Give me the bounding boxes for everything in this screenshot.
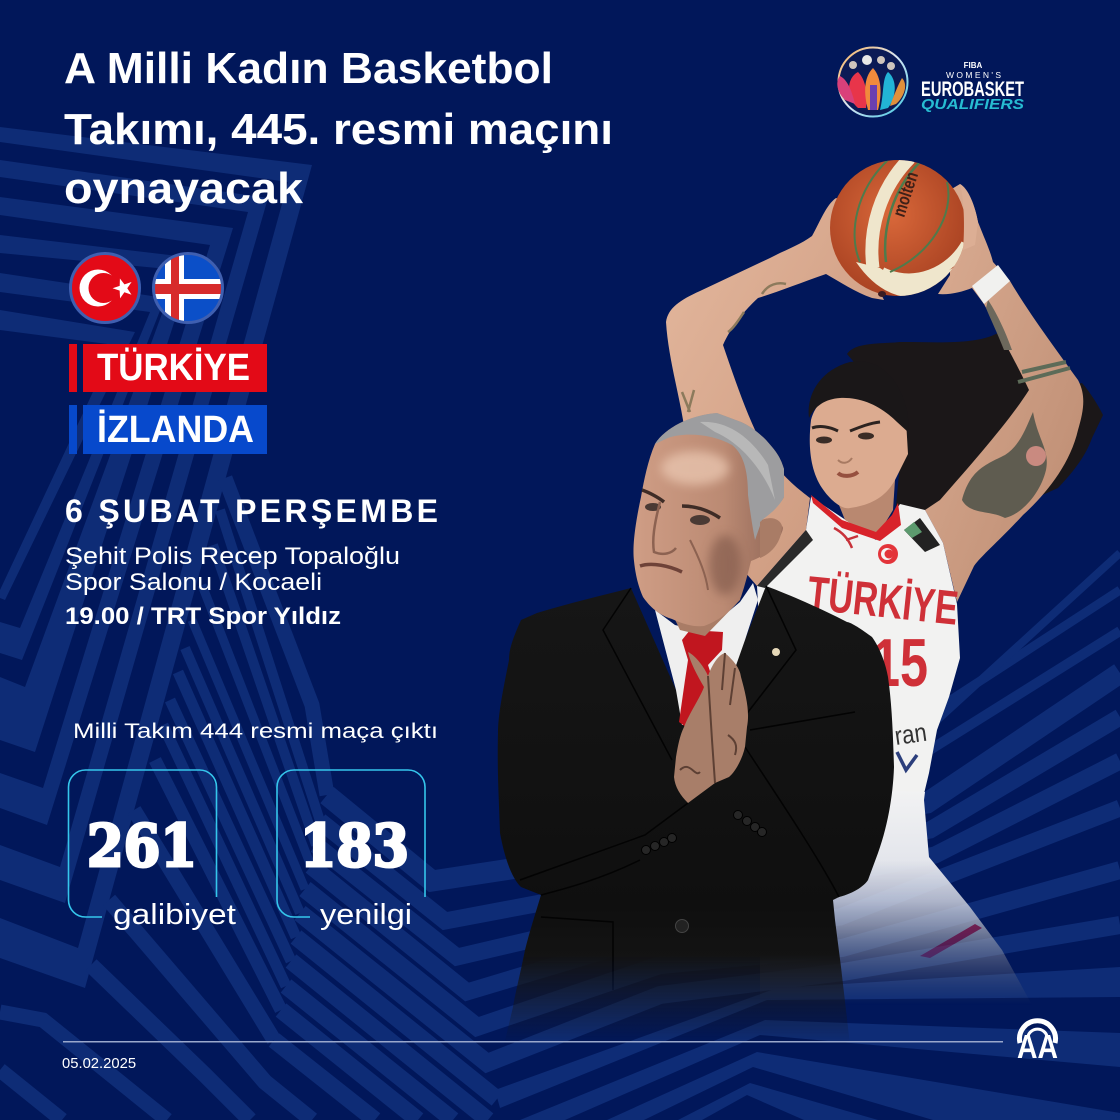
jacket button [676,920,688,932]
red collar [811,495,901,541]
grey hair [655,413,784,540]
shorts red trim [920,924,982,958]
venue [65,543,400,596]
forehead highlight [661,451,729,485]
puma logo [834,528,858,548]
qualifiers: QUALIFIERS [921,96,1024,113]
team bar: Türkiye: TÜRKİYE [97,346,250,389]
neck [675,597,741,636]
head [633,413,784,626]
AA logo: AA [1017,1028,1058,1065]
jacket seams [520,586,855,990]
stat box: losses: 183 [300,812,409,880]
hair highlight [700,422,775,500]
left arm [666,198,884,586]
title: Takımı, 445. resmi maçını [64,105,613,154]
jersey name: TÜRKİYE [805,567,961,636]
women's: WOMEN'S [946,70,1001,80]
right-hand fingers on ball [960,184,978,250]
neck [839,480,895,532]
player figure [666,158,1103,1005]
player brows eyes mouth [812,422,880,476]
left arm tattoos [682,283,786,412]
shorts [833,792,1026,994]
date: 05.02.2025 [62,1056,136,1072]
jacket [498,586,894,1045]
stat box: wins: 261 [87,812,197,880]
ear [760,518,782,558]
head hair [809,361,908,432]
match date: 6 ŞUBAT PERŞEMBE [65,493,438,529]
stat box: losses [277,770,425,931]
nail [878,291,886,297]
basketball [830,158,966,298]
time and channel: 19.00 / TRT Spor Yıldız [65,603,341,630]
venue: Şehit Polis Recep Topaloğlu [65,543,400,570]
coach eyes and brows [640,490,720,590]
competition logo [837,48,1024,116]
title: oynayacak [64,164,304,213]
hand creases [680,653,736,783]
title [64,44,613,213]
turkey crest [878,544,898,564]
emblem [837,48,908,116]
face [810,393,908,508]
right arm [925,184,1083,602]
shirt [655,583,758,725]
eurobasket: EUROBASKET [921,78,1024,101]
jersey number: 15 [872,625,928,701]
sleeve buttons [642,810,766,854]
venue: Spor Salonu / Kocaeli [65,569,322,596]
cheek shadow [709,535,741,595]
flag: Türkiye [70,254,140,322]
coach figure [498,413,894,1045]
ponytail hair [847,333,1103,512]
sponsor text: ran [893,717,929,751]
title: A Milli Kadın Basketbol [64,44,553,93]
clapping hands [674,652,748,803]
footer rule [63,1041,1003,1042]
stat box: wins [68,770,236,931]
stat box: losses: yenilgi [320,899,412,931]
flag: İzlanda [153,253,223,323]
patch colour [904,522,922,538]
sponsor mark [897,752,917,770]
ball brand: molten [889,169,922,219]
lapel pin [772,648,780,656]
team bar: İzlanda: İZLANDA [97,409,254,451]
tie [679,630,723,730]
dark under-shirt strip [757,530,813,588]
stats heading: Milli Takım 444 resmi maça çıktı [73,719,438,743]
right arm tattoos [962,300,1070,518]
wristband [972,265,1010,304]
jersey [757,497,960,800]
stat box: wins: galibiyet [113,899,236,931]
patches [904,518,940,552]
fiba mark: FIBA [964,61,983,70]
